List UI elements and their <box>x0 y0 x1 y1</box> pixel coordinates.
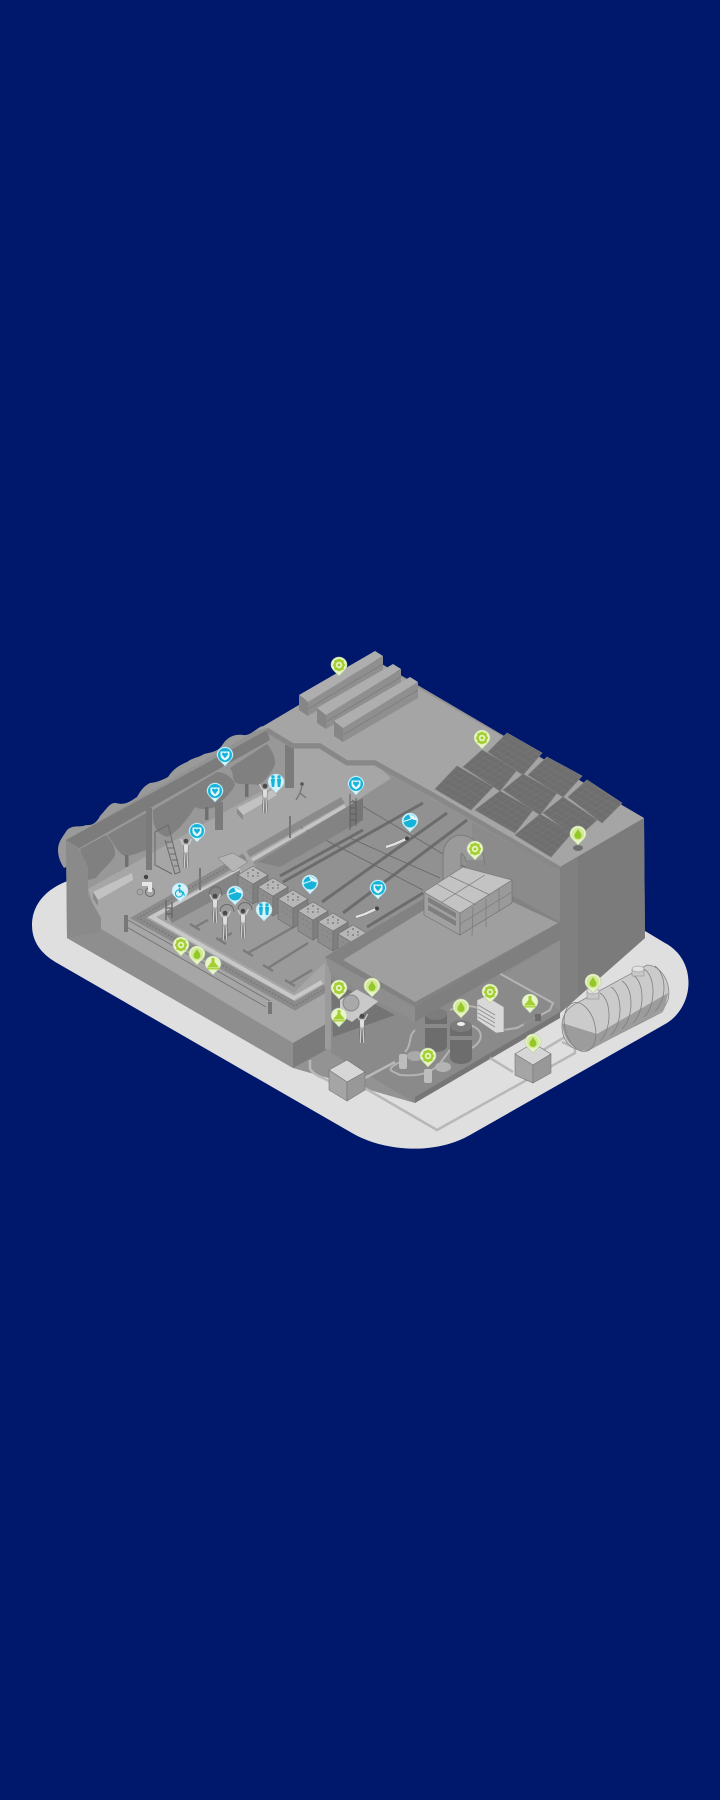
wall return <box>350 798 363 828</box>
pool roller <box>125 915 270 1014</box>
tank ribs <box>559 966 664 1055</box>
buried cube tank left <box>329 1060 365 1101</box>
floor front edge right <box>415 1012 560 1103</box>
tank hatch rear <box>632 966 644 976</box>
roof drain <box>573 845 583 851</box>
map pin: people 2 <box>256 902 272 921</box>
lane rope lines <box>300 800 470 890</box>
heat pump unit <box>477 996 504 1033</box>
map pin: ball 2 <box>302 875 318 894</box>
tree 2 <box>107 813 146 856</box>
scalloped hedge along back wall <box>58 726 274 868</box>
room floor and walls <box>331 925 560 1097</box>
fence post 1 <box>199 868 201 890</box>
map pin: heart 4 <box>348 776 364 795</box>
ground slab <box>32 860 688 1149</box>
back wall <box>73 733 290 889</box>
bench 1 <box>93 873 133 906</box>
map pin: flask dosing <box>522 994 538 1013</box>
duct elbow <box>452 844 476 885</box>
upper coping highlight <box>252 806 345 860</box>
right pool floor <box>253 777 472 960</box>
unit left face <box>424 892 460 935</box>
map pin: people 1 <box>268 774 284 793</box>
first flat block <box>218 853 248 872</box>
map pin: drop tanks <box>453 999 469 1018</box>
map pin: ball 3 <box>402 813 418 832</box>
outdoor pipes and tanks <box>310 845 669 1130</box>
building silhouette backing <box>66 660 645 1103</box>
tree 4 <box>187 772 235 809</box>
tower band <box>560 857 578 1013</box>
upper pool wall <box>258 805 350 867</box>
dosing pump <box>524 1014 541 1025</box>
staff figure <box>356 1014 368 1043</box>
fence post 2 <box>289 816 291 838</box>
map pin: drop pump room <box>364 978 380 997</box>
trees <box>80 744 275 880</box>
fan unit <box>340 980 380 1022</box>
map pin: ball 1 <box>227 886 243 905</box>
interior wall under roof <box>472 822 560 925</box>
map pin: flask pool edge <box>205 956 221 975</box>
swimmer 1 <box>386 836 409 847</box>
exerciser 3 <box>238 902 252 938</box>
map pin: gear roof <box>331 657 347 676</box>
park furniture and visitors <box>93 782 306 1014</box>
air handling unit <box>424 844 512 936</box>
tree 1 <box>80 835 115 880</box>
exerciser 1 <box>209 887 222 923</box>
room right wall <box>503 940 560 1010</box>
map pin: heart 3 <box>189 823 205 842</box>
tank water <box>562 993 668 1051</box>
map pin: heart 1 <box>217 747 233 766</box>
slab right face <box>415 922 560 1022</box>
coping highlight <box>152 870 322 998</box>
left pool wall <box>165 870 240 923</box>
left pool coping outer <box>138 857 326 1006</box>
map pin: heart 5 <box>370 880 386 899</box>
tree 3 <box>153 790 195 837</box>
exerciser 2 <box>220 904 234 940</box>
bench 2 <box>237 790 277 820</box>
tank body <box>562 965 669 1050</box>
unit vents <box>428 897 456 926</box>
duct block 3 <box>334 677 418 742</box>
pillars <box>146 745 294 870</box>
tower right face <box>560 818 645 1013</box>
unit right face <box>460 880 512 935</box>
lifeguard figure <box>180 839 192 868</box>
pool steps frame <box>166 900 172 920</box>
map pin: gear pumps <box>420 1048 436 1067</box>
swimmer 2 <box>356 906 379 917</box>
pump room <box>325 925 560 1103</box>
left column <box>325 957 331 1049</box>
pool ladder <box>350 794 356 830</box>
duct base <box>466 860 484 876</box>
right pool <box>248 777 472 960</box>
pump group 1 <box>399 1051 423 1069</box>
tree trunks <box>125 784 248 867</box>
map pin: gear air handler <box>467 841 483 860</box>
left end wall <box>66 840 101 938</box>
duct block 2 <box>317 664 401 729</box>
unit top <box>424 867 512 913</box>
map pin: gear pool edge <box>173 937 189 956</box>
buried cube tank right <box>515 1043 551 1083</box>
wheelchair user <box>137 875 154 896</box>
upper coping <box>248 800 343 854</box>
map pin: drop roof <box>570 826 586 845</box>
plant pipes <box>391 972 553 1075</box>
slab rim <box>325 872 560 1007</box>
map pin: gear solar <box>474 730 490 749</box>
pump group 2 <box>424 1062 451 1083</box>
building shell <box>58 660 645 1103</box>
map pin: heart 2 <box>207 783 223 802</box>
room dark wall <box>331 980 395 1037</box>
back wall top band <box>66 730 270 849</box>
left pool floor <box>160 886 350 993</box>
coping dots <box>138 857 326 1006</box>
pool lane markings <box>190 920 312 986</box>
unit panel lines <box>437 875 512 936</box>
map pin: gear pump room <box>331 980 347 999</box>
front wall face <box>67 928 293 1068</box>
map pin: flask pump room <box>331 1008 347 1027</box>
terrace slab <box>325 844 560 1022</box>
pool lanes <box>280 803 467 927</box>
storage tank 2 <box>450 1020 472 1064</box>
lifeguard chair <box>155 825 180 874</box>
left pool <box>138 853 368 1006</box>
cooling ducts on roof <box>299 651 418 742</box>
storage tank 1 <box>425 1008 447 1052</box>
divider block row <box>218 853 368 963</box>
slab top <box>343 882 558 1002</box>
map pin: wheelchair <box>172 883 188 902</box>
large water storage tank <box>559 965 669 1055</box>
roof edge lip <box>267 730 560 869</box>
tree 5 <box>230 744 275 785</box>
duct block 1 <box>299 651 383 716</box>
map pin: drop storage tank <box>585 974 601 993</box>
map pin: drop pool edge <box>189 946 205 965</box>
running child <box>296 782 306 800</box>
solar panels <box>435 733 622 857</box>
roof surface <box>255 660 644 867</box>
map pin: gear heat pump <box>482 984 498 1003</box>
outdoor pipework <box>310 1028 580 1130</box>
floor front edge <box>331 1047 415 1103</box>
tank hatch front <box>587 988 599 999</box>
map pin: drop cube tank <box>525 1034 541 1053</box>
front wall end face <box>293 1024 326 1068</box>
sitting visitor <box>260 784 270 813</box>
park floor <box>88 745 402 1043</box>
slab left face <box>325 957 415 1022</box>
